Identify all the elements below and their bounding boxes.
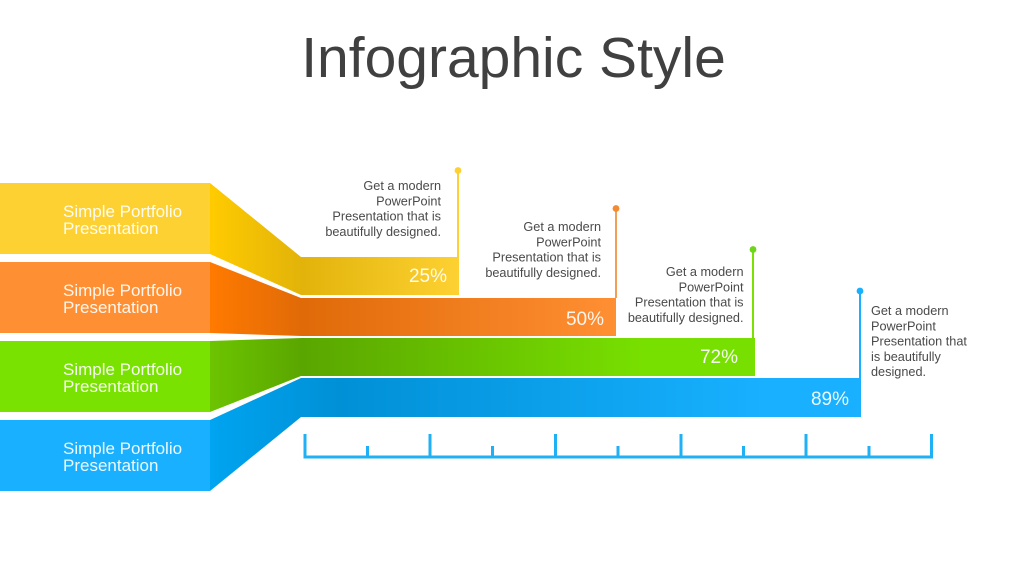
text block: 89% description: designed.	[871, 365, 926, 379]
yellow funnel and bar	[210, 183, 459, 295]
marker: yellow pin	[455, 167, 461, 257]
title: Infographic Style	[301, 26, 726, 90]
text block: 25% description: beautifully designed.	[325, 225, 441, 239]
yellow label: Presentation	[63, 219, 158, 238]
text block: 25% description: PowerPoint	[376, 194, 441, 208]
orange funnel and bar	[210, 262, 616, 336]
blue label: Simple Portfolio	[63, 439, 182, 458]
marker: green pin	[750, 246, 756, 338]
text block: 72% description: beautifully designed.	[628, 311, 744, 325]
text block: 89% description: PowerPoint	[871, 319, 936, 333]
green value: 72%	[700, 347, 738, 368]
panel: green 72% band	[0, 338, 755, 412]
panel: blue 89% band	[0, 378, 861, 491]
text block: 50% description: PowerPoint	[536, 235, 601, 249]
blue value: 89%	[811, 389, 849, 410]
text block: 72% description: Presentation that is	[635, 296, 744, 310]
green label: Simple Portfolio	[63, 360, 182, 379]
yellow label: Simple Portfolio	[63, 202, 182, 221]
orange label: Presentation	[63, 298, 158, 317]
green label: Presentation	[63, 377, 158, 396]
text block: 89% description: is beautifully	[871, 350, 941, 364]
text block: 72% description: Get a modern	[666, 265, 744, 279]
text block: 50% description: Presentation that is	[492, 251, 601, 265]
text block: 50% description: Get a modern	[523, 220, 601, 234]
orange label: Simple Portfolio	[63, 281, 182, 300]
blue funnel and bar	[210, 378, 861, 491]
yellow label block	[0, 183, 210, 254]
yellow value: 25%	[409, 266, 447, 287]
marker: blue pin	[857, 288, 863, 378]
blue label: Presentation	[63, 456, 158, 475]
text block: 89% description: Presentation that	[871, 335, 967, 349]
blue label block	[0, 420, 210, 491]
orange label block	[0, 262, 210, 333]
panel: yellow 25% band	[0, 183, 459, 295]
green label block	[0, 341, 210, 412]
text block: 89% description: Get a modern	[871, 304, 949, 318]
marker: orange pin	[613, 205, 619, 298]
green funnel and bar	[210, 338, 755, 412]
text block: 72% description: PowerPoint	[679, 280, 744, 294]
scale ruler	[304, 434, 933, 458]
text block: 25% description: Presentation that is	[332, 210, 441, 224]
text block: 50% description: beautifully designed.	[485, 266, 601, 280]
text block: 25% description: Get a modern	[363, 179, 441, 193]
orange value: 50%	[566, 309, 604, 330]
panel: orange 50% band	[0, 262, 616, 336]
